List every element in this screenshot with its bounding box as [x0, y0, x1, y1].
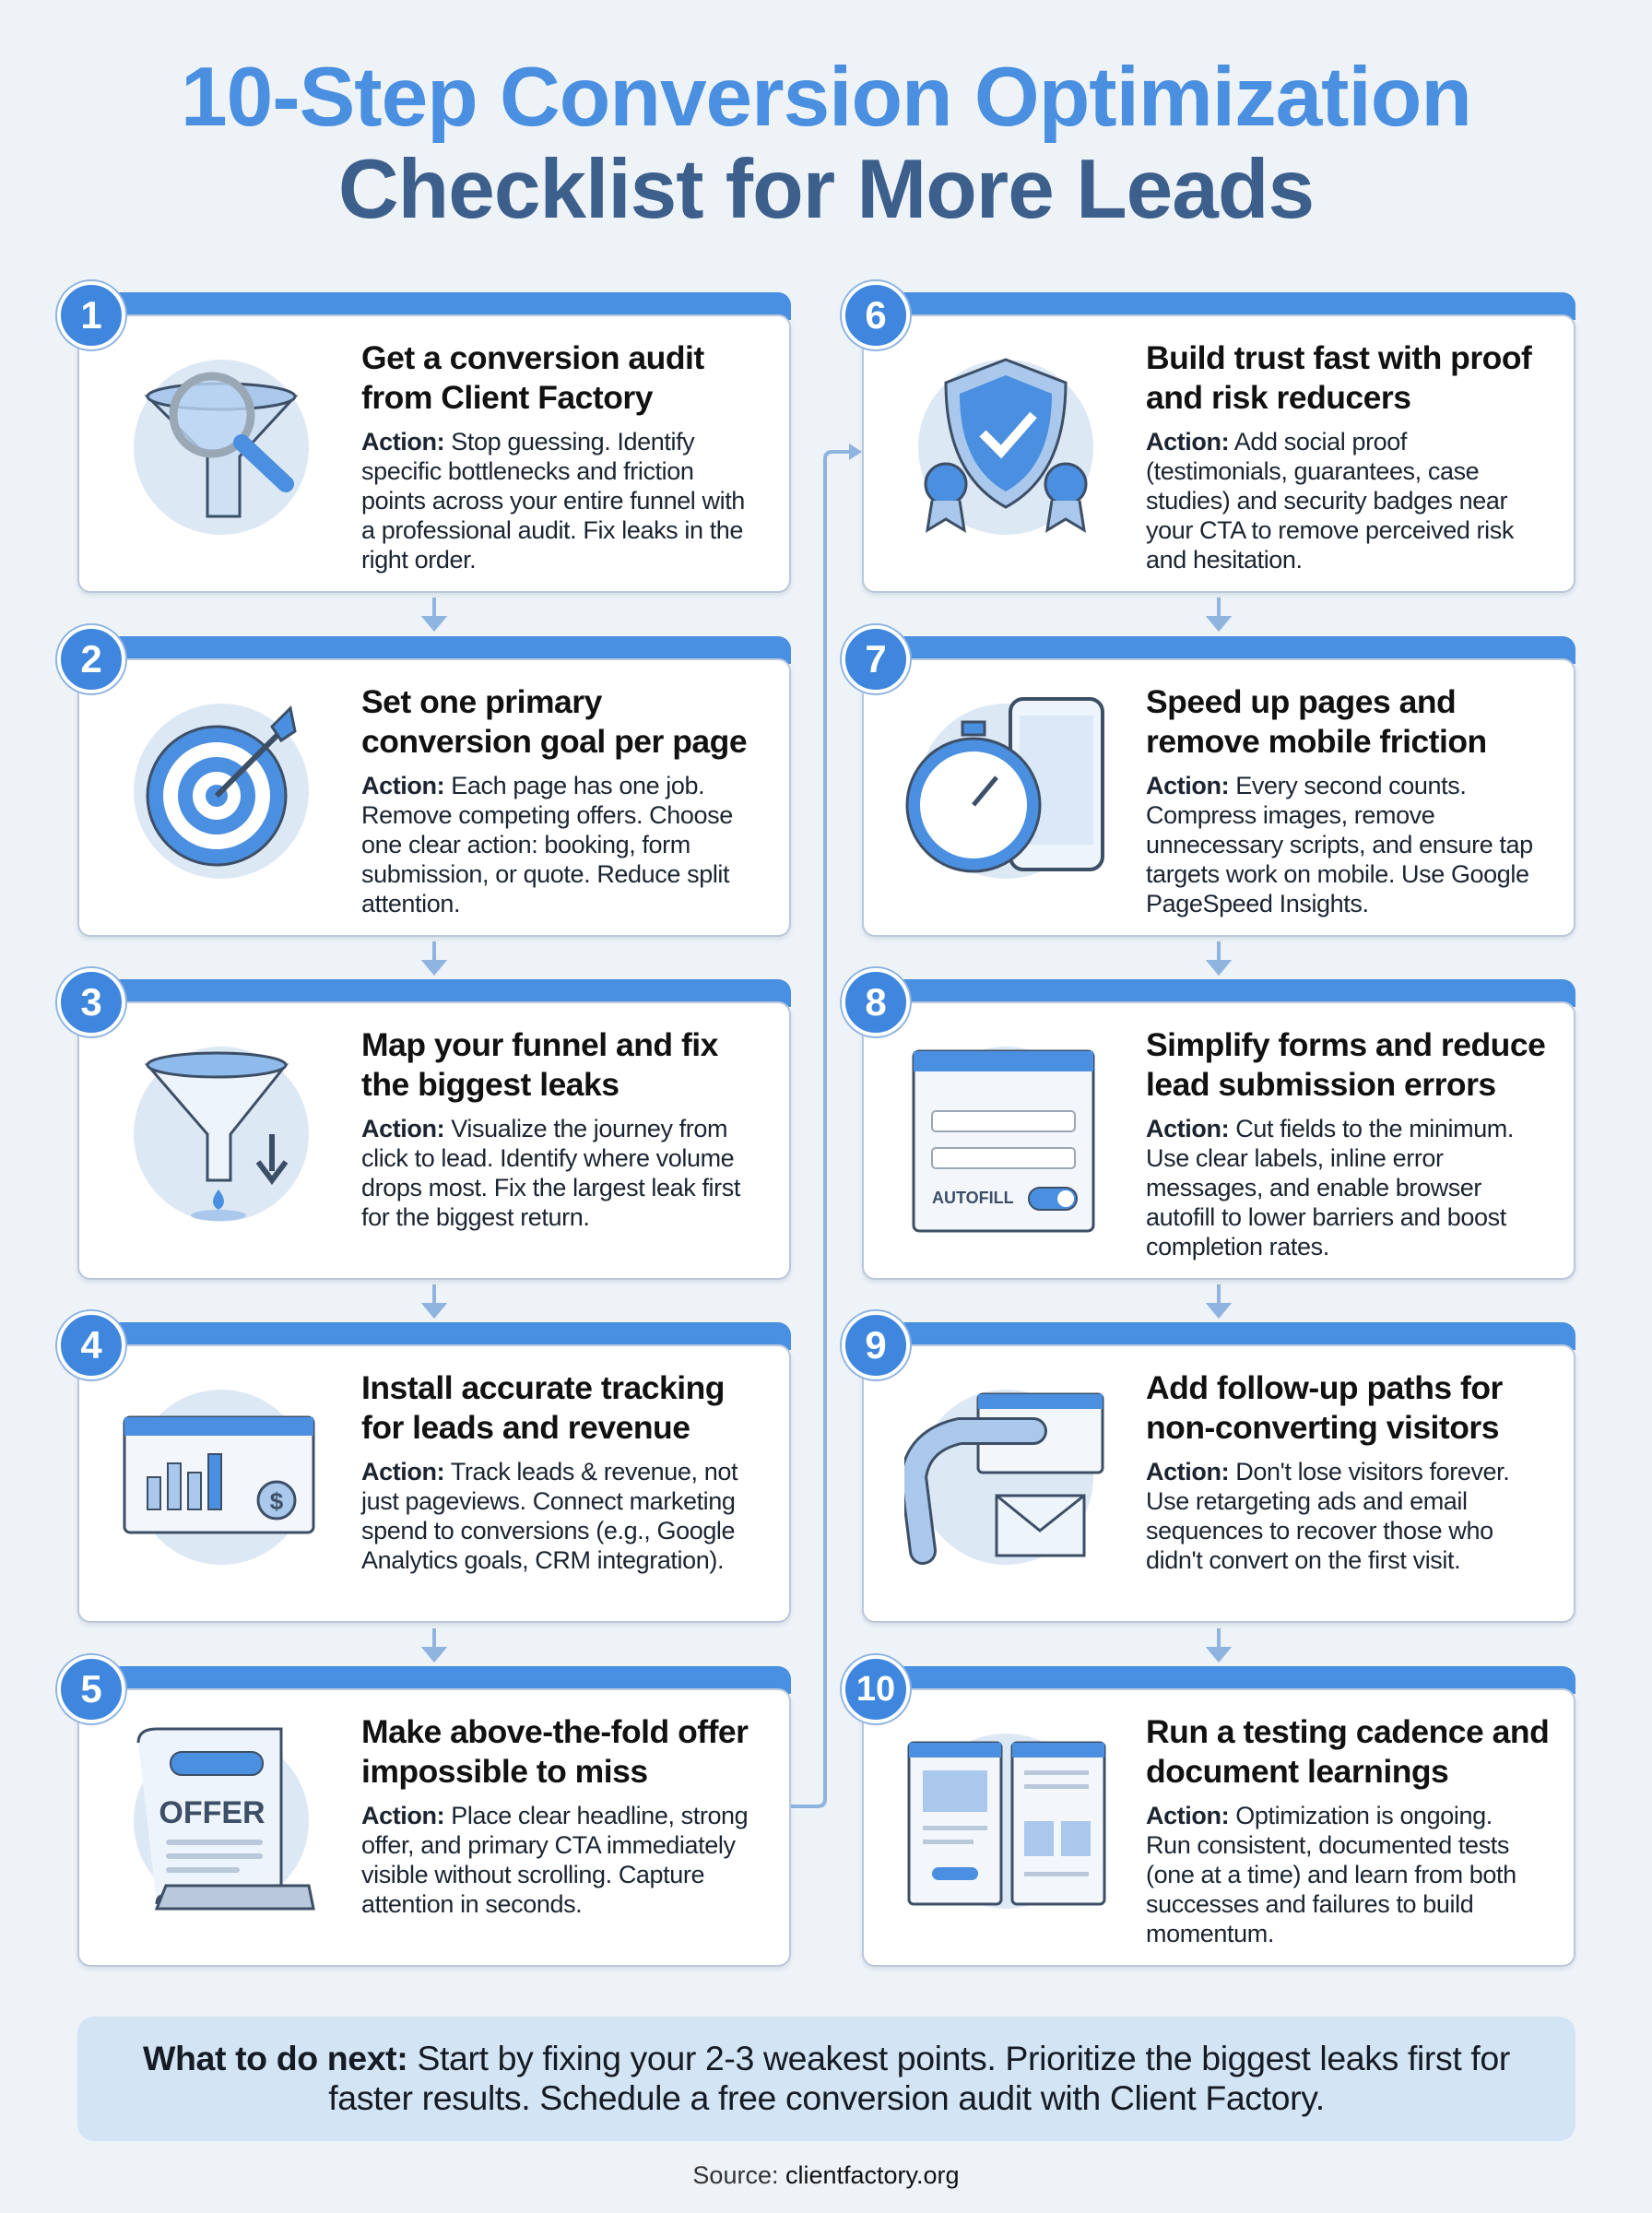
text block: Action: Each page has one job. Remove competing offers. Choose one clear action: booking, form submission, or quote. Reduce split attention.: [361, 772, 733, 917]
panel: step 9: [840, 1309, 1576, 1627]
panel: step 7: [840, 623, 1576, 941]
icon: analytics dashboard: [124, 1390, 315, 1565]
icon: boomerang, browser, envelope: [904, 1390, 1104, 1565]
panel: step 6: [840, 279, 1576, 597]
icon: stopwatch and phone: [905, 697, 1104, 879]
title: [181, 51, 1471, 236]
heading: Simplify forms and reduce lead submission errors: [1146, 1026, 1545, 1103]
text block: Action: Optimization is ongoing. Run consistent, documented tests (one at a time) and learn from both successes and failures to build momentum.: [1146, 1802, 1516, 1947]
callout: what to do next: [77, 2017, 1575, 2141]
icon: offer scroll: OFFER: [159, 1795, 266, 1830]
heading: Add follow-up paths for non-converting visitors: [1146, 1369, 1503, 1446]
icon: target: [134, 704, 309, 879]
callout: what to do next: faster results. Schedule a free conversion audit with Client Factory.: [328, 2078, 1325, 2117]
icon: A/B pages: [907, 1734, 1106, 1909]
text block: Action: Track leads & revenue, not just pageviews. Connect marketing spend to conversions (e.g., Google Analytics goals, CRM integration).: [361, 1458, 738, 1574]
heading: Make above-the-fold offer impossible to miss: [361, 1713, 748, 1790]
panel: step 2: [55, 623, 792, 941]
panel: step 10: [840, 1653, 1576, 1970]
panel: step 1: 1: [80, 293, 102, 337]
icon: autofill form: [913, 1047, 1095, 1232]
panel: step 2: 2: [80, 637, 102, 680]
panel: step 3: 3: [80, 980, 102, 1024]
panel: step 7: 7: [865, 637, 887, 680]
panel: step 8: 8: [865, 980, 887, 1024]
title: Checklist for More Leads: [338, 143, 1314, 236]
text block: Action: Every second counts. Compress images, remove unnecessary scripts, and ensure tap targets work on mobile. Use Google PageSpeed Insights.: [1146, 772, 1533, 917]
panel: step 8: [840, 966, 1576, 1284]
arrow: connector from step 5 to step 6: [791, 444, 862, 1808]
panel: step 1: [55, 279, 792, 597]
title: 10-Step Conversion Optimization: [181, 51, 1471, 144]
text block: Action: Don't lose visitors forever. Use retargeting ads and email sequences to recover those who didn't convert on the first visit.: [1146, 1458, 1509, 1574]
icon: analytics dashboard: $: [270, 1487, 284, 1515]
heading: Set one primary conversion goal per page: [361, 683, 747, 760]
heading: Map your funnel and fix the biggest leaks: [361, 1026, 718, 1103]
heading: Build trust fast with proof and risk reducers: [1146, 339, 1531, 416]
text block: Action: Cut fields to the minimum. Use clear labels, inline error messages, and enable browser autofill to lower barriers and boost completion rates.: [1146, 1115, 1514, 1260]
panel: step 4: 4: [80, 1323, 102, 1367]
panel: step 5: 5: [80, 1667, 102, 1710]
text block: Action: Stop guessing. Identify specific bottlenecks and friction points across your entire funnel with a professional audit. Fix leaks in the right order.: [361, 428, 745, 574]
icon: shield with badges: [918, 358, 1093, 535]
text block: Action: Visualize the journey from click to lead. Identify where volume drops most. Fix the largest leak first for the biggest return.: [361, 1115, 740, 1231]
heading: Get a conversion audit from Client Factory: [361, 339, 704, 416]
panel: step 6: 6: [865, 293, 887, 337]
heading: Speed up pages and remove mobile friction: [1146, 683, 1487, 760]
source: Source: clientfactory.org: [692, 2161, 960, 2189]
callout: what to do next: What to do next: Start by fixing your 2-3 weakest points. Prioritize the biggest leaks first for: [143, 2039, 1510, 2077]
icon: funnel with magnifier: [134, 360, 309, 535]
panel: step 9: 9: [865, 1323, 887, 1367]
panel: step 5: [55, 1653, 792, 1970]
icon: offer scroll: [134, 1728, 315, 1911]
text block: Action: Add social proof (testimonials, guarantees, case studies) and security badges near your CTA to remove perceived risk and hesitation.: [1146, 428, 1514, 574]
text block: Action: Place clear headline, strong offer, and primary CTA immediately visible without scrolling. Capture attention in seconds.: [361, 1802, 748, 1918]
heading: Install accurate tracking for leads and revenue: [361, 1369, 725, 1446]
icon: leaking funnel: [134, 1047, 309, 1222]
panel: step 10: 10: [856, 1670, 895, 1709]
icon: autofill form: AUTOFILL: [932, 1189, 1014, 1207]
heading: Run a testing cadence and document learnings: [1146, 1713, 1549, 1790]
panel: step 3: [55, 966, 792, 1284]
panel: step 4: [55, 1309, 792, 1627]
